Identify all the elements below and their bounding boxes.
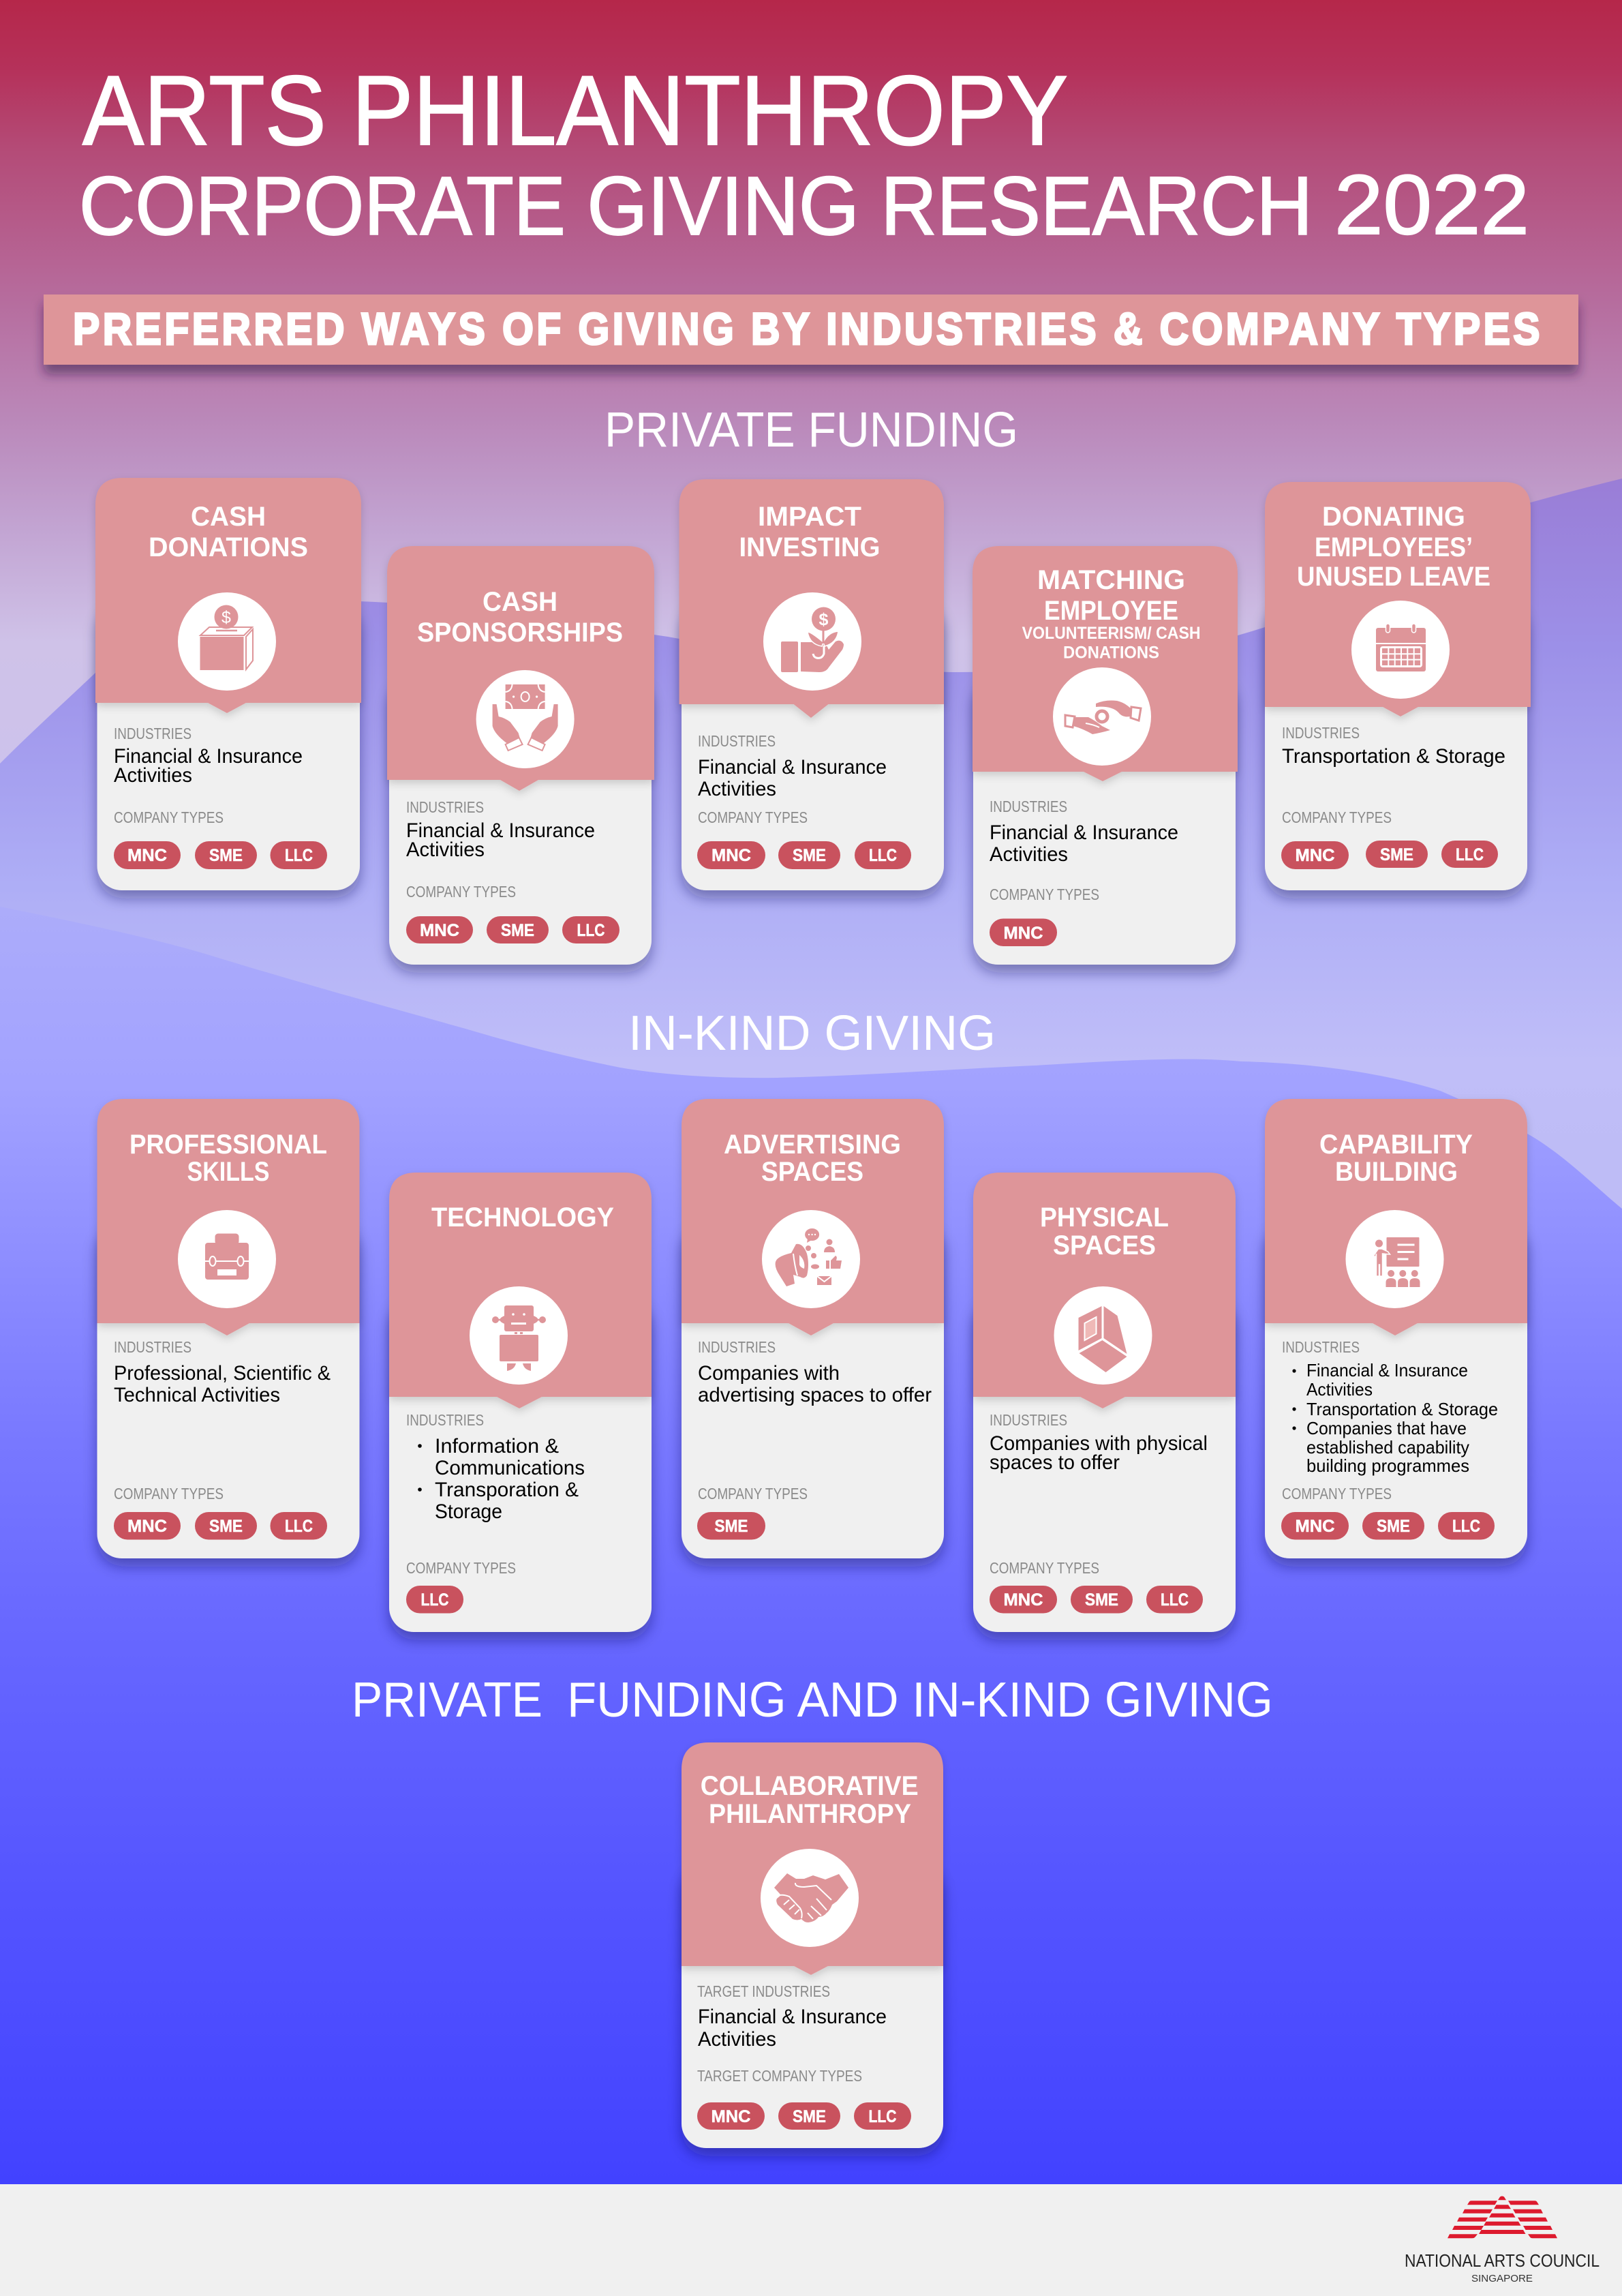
card title bbox=[1319, 1130, 1473, 1187]
industries: Storage bbox=[435, 1500, 502, 1523]
industries bbox=[990, 1411, 1208, 1474]
card title bbox=[417, 587, 623, 648]
card header bbox=[95, 478, 361, 713]
industries bbox=[406, 798, 595, 861]
company types: LLC bbox=[1456, 845, 1484, 864]
industries: INDUSTRIES bbox=[698, 732, 776, 750]
icon: calendar bbox=[1351, 601, 1450, 699]
industries: building programmes bbox=[1306, 1455, 1469, 1476]
panel: advertising spaces bbox=[682, 1099, 944, 1558]
company types: MNC bbox=[1003, 1590, 1043, 1610]
company types: MNC bbox=[127, 1517, 167, 1536]
industries bbox=[1282, 1338, 1498, 1476]
industries: Companies with bbox=[698, 1362, 840, 1385]
industries: INDUSTRIES bbox=[114, 725, 192, 742]
card title: PHILANTHROPY bbox=[709, 1799, 911, 1829]
icon: hands holding banknote bbox=[476, 670, 575, 768]
card header bbox=[682, 1742, 943, 1975]
card title: TECHNOLOGY bbox=[431, 1203, 614, 1233]
card header bbox=[682, 1099, 944, 1335]
industries: INDUSTRIES bbox=[1282, 1338, 1360, 1356]
card title: CAPABILITY bbox=[1319, 1130, 1473, 1160]
company types bbox=[1281, 1485, 1495, 1539]
company types: COMPANY TYPES bbox=[698, 809, 808, 826]
icon: briefcase bbox=[178, 1210, 276, 1308]
industries: INDUSTRIES bbox=[114, 1338, 192, 1356]
industries: Financial & Insurance bbox=[406, 819, 595, 842]
card title: EMPLOYEE bbox=[1044, 596, 1178, 626]
icon: hands exchanging coin bbox=[1053, 667, 1151, 766]
card title bbox=[129, 1130, 327, 1187]
industries: Activities bbox=[1306, 1379, 1373, 1400]
logo: National Arts Council: NATIONAL ARTS COUNCIL bbox=[1405, 2250, 1600, 2271]
card header bbox=[679, 479, 944, 718]
heading: in-kind giving: IN-KIND GIVING bbox=[628, 1006, 996, 1061]
panel: technology bbox=[389, 1173, 652, 1632]
company types: MNC bbox=[1295, 1517, 1334, 1536]
panel: capability building bbox=[1265, 1099, 1527, 1558]
title: CORPORATE GIVING RESEARCH bbox=[79, 160, 1313, 252]
target industries: TARGET INDUSTRIES bbox=[697, 1982, 830, 2000]
title bbox=[79, 55, 1529, 252]
card title: ADVERTISING bbox=[724, 1130, 901, 1160]
card title: CASH bbox=[483, 587, 557, 617]
company types bbox=[990, 1559, 1203, 1613]
company types: MNC bbox=[420, 921, 459, 940]
panel: matching employee bbox=[973, 546, 1238, 965]
industries bbox=[1282, 724, 1505, 768]
card header bbox=[1265, 482, 1531, 716]
company types bbox=[1281, 809, 1498, 869]
icon: presenter and audience bbox=[1345, 1210, 1443, 1308]
card title: SPACES bbox=[1053, 1230, 1156, 1260]
card title: DONATING bbox=[1322, 502, 1465, 532]
card title: UNUSED LEAVE bbox=[1297, 562, 1490, 592]
industries: INDUSTRIES bbox=[698, 1338, 776, 1356]
industries: spaces to offer bbox=[990, 1451, 1120, 1474]
industries: established capability bbox=[1306, 1437, 1469, 1457]
card title bbox=[149, 502, 308, 562]
industries: Transportation & Storage bbox=[1282, 745, 1505, 768]
company types: SME bbox=[209, 1517, 243, 1536]
card title: SPONSORSHIPS bbox=[417, 618, 623, 648]
panel: cash donations bbox=[95, 478, 361, 890]
company types: LLC bbox=[577, 921, 605, 940]
company types: COMPANY TYPES bbox=[990, 886, 1099, 903]
panel: physical spaces bbox=[973, 1173, 1236, 1632]
company types: SME bbox=[209, 846, 243, 865]
company types: SME bbox=[501, 921, 534, 940]
industries: Information & bbox=[435, 1435, 559, 1457]
heading: private funding: PRIVATE FUNDING bbox=[605, 403, 1018, 457]
icon: donation box: $ bbox=[221, 608, 231, 627]
industries: INDUSTRIES bbox=[406, 1411, 484, 1429]
company types bbox=[697, 1485, 808, 1539]
card title bbox=[1297, 502, 1490, 592]
card title: COLLABORATIVE bbox=[701, 1771, 919, 1801]
target company types: MNC bbox=[711, 2107, 751, 2126]
company types: LLC bbox=[1452, 1517, 1480, 1536]
industries: Activities bbox=[698, 778, 776, 800]
industries bbox=[698, 1338, 932, 1406]
card title bbox=[1022, 565, 1201, 663]
card header bbox=[1265, 1099, 1527, 1335]
company types: COMPANY TYPES bbox=[1282, 1485, 1392, 1502]
heading: private funding and in-kind giving: FUNDING AND IN-KIND GIVING bbox=[567, 1673, 1273, 1727]
card title: PROFESSIONAL bbox=[129, 1130, 327, 1160]
company types bbox=[114, 809, 327, 869]
card title: INVESTING bbox=[739, 532, 881, 562]
icon: handshake bbox=[761, 1849, 859, 1947]
icon: robot bbox=[470, 1286, 568, 1385]
industries: Technical Activities bbox=[114, 1384, 280, 1406]
company types: COMPANY TYPES bbox=[1282, 809, 1392, 826]
card title: SKILLS bbox=[187, 1157, 270, 1187]
industries: INDUSTRIES bbox=[990, 1411, 1067, 1429]
logo: National Arts Council: SINGAPORE bbox=[1471, 2273, 1533, 2284]
card title: VOLUNTEERISM/ CASH bbox=[1022, 624, 1201, 643]
company types: COMPANY TYPES bbox=[114, 809, 224, 826]
icon: 3D room bbox=[1054, 1286, 1152, 1385]
company types bbox=[697, 809, 911, 869]
company types: COMPANY TYPES bbox=[406, 883, 516, 901]
target industries bbox=[697, 1982, 887, 2051]
company types: LLC bbox=[421, 1590, 448, 1610]
banner: preferred ways of giving bbox=[44, 294, 1578, 365]
company types: COMPANY TYPES bbox=[114, 1485, 224, 1502]
industries: INDUSTRIES bbox=[1282, 724, 1360, 742]
icon: hand with growing coin: $ bbox=[819, 610, 829, 629]
industries: INDUSTRIES bbox=[990, 798, 1067, 815]
target industries: Financial & Insurance bbox=[698, 2006, 887, 2028]
industries: Financial & Insurance bbox=[1306, 1360, 1468, 1380]
company types: COMPANY TYPES bbox=[406, 1559, 516, 1577]
card title: PHYSICAL bbox=[1040, 1203, 1169, 1233]
card header bbox=[389, 1173, 652, 1408]
target company types bbox=[697, 2067, 911, 2130]
target company types: SME bbox=[793, 2107, 826, 2126]
card header bbox=[973, 546, 1238, 781]
company types bbox=[990, 886, 1099, 946]
panel: professional skills bbox=[97, 1099, 360, 1558]
company types bbox=[406, 1559, 516, 1613]
industries: Transportation & Storage bbox=[1306, 1399, 1498, 1419]
card title bbox=[1040, 1203, 1169, 1260]
company types bbox=[114, 1485, 327, 1539]
industries bbox=[114, 725, 303, 787]
target industries: Activities bbox=[698, 2028, 776, 2051]
card title: EMPLOYEES’ bbox=[1315, 532, 1473, 562]
icon: donation box bbox=[178, 592, 276, 691]
company types: MNC bbox=[1295, 846, 1334, 865]
industries bbox=[990, 798, 1178, 866]
card header bbox=[973, 1173, 1236, 1408]
industries: Communications bbox=[435, 1457, 585, 1479]
card title: SPACES bbox=[761, 1157, 863, 1187]
industries bbox=[114, 1338, 331, 1406]
industries: Companies that have bbox=[1306, 1418, 1467, 1438]
industries: Financial & Insurance bbox=[990, 821, 1178, 844]
industries: Financial & Insurance bbox=[114, 745, 303, 768]
icon: hand with growing coin bbox=[763, 592, 861, 691]
panel: impact investing bbox=[679, 479, 944, 890]
card header bbox=[387, 546, 654, 791]
industries: Activities bbox=[990, 843, 1068, 866]
card title: IMPACT bbox=[758, 502, 861, 532]
card title: MATCHING bbox=[1037, 565, 1185, 595]
target company types: TARGET COMPANY TYPES bbox=[697, 2067, 862, 2085]
card title: BUILDING bbox=[1335, 1157, 1458, 1187]
company types: LLC bbox=[285, 1517, 313, 1536]
industries: Financial & Insurance bbox=[698, 756, 887, 779]
industries bbox=[698, 732, 887, 800]
company types: SME bbox=[714, 1517, 748, 1536]
panel: cash sponsorships bbox=[387, 546, 654, 965]
company types: COMPANY TYPES bbox=[698, 1485, 808, 1502]
company types: COMPANY TYPES bbox=[990, 1559, 1099, 1577]
industries: Professional, Scientific & bbox=[114, 1362, 331, 1385]
industries: Activities bbox=[114, 764, 192, 787]
company types: SME bbox=[793, 846, 826, 865]
card header bbox=[97, 1099, 360, 1335]
title: 2022 bbox=[1334, 158, 1529, 252]
target company types: LLC bbox=[868, 2107, 897, 2126]
panel: donating employees' unused leave bbox=[1265, 482, 1531, 890]
card title: DONATIONS bbox=[1063, 644, 1159, 663]
industries: Companies with physical bbox=[990, 1432, 1208, 1455]
background wave: upper purple bbox=[0, 479, 1622, 1295]
background wave: lower blue bbox=[0, 907, 1622, 2296]
industries: advertising spaces to offer bbox=[698, 1384, 932, 1406]
heading: private funding and in-kind giving: PRIVATE bbox=[352, 1673, 542, 1727]
company types: SME bbox=[1380, 845, 1413, 864]
icon: megaphone and social bbox=[762, 1210, 860, 1308]
industries: Activities bbox=[406, 839, 485, 861]
card title bbox=[724, 1130, 901, 1187]
company types: SME bbox=[1085, 1590, 1118, 1610]
company types: MNC bbox=[1003, 924, 1043, 943]
card title: CASH bbox=[191, 502, 266, 532]
card title bbox=[701, 1771, 919, 1829]
company types: MNC bbox=[711, 846, 751, 865]
company types: LLC bbox=[1161, 1590, 1189, 1610]
logo: National Arts Council bbox=[1405, 2196, 1600, 2284]
company types: LLC bbox=[285, 846, 313, 865]
industries: INDUSTRIES bbox=[406, 798, 484, 816]
card title: DONATIONS bbox=[149, 532, 308, 562]
industries bbox=[406, 1411, 585, 1523]
footer band bbox=[0, 2184, 1622, 2296]
company types bbox=[406, 883, 619, 943]
title: ARTS PHILANTHROPY bbox=[82, 55, 1068, 166]
panel: collaborative philanthropy bbox=[682, 1742, 943, 2148]
company types: LLC bbox=[869, 846, 897, 865]
card title bbox=[739, 502, 881, 562]
industries: Transporation & bbox=[435, 1479, 579, 1501]
company types: MNC bbox=[127, 846, 167, 865]
company types: SME bbox=[1377, 1517, 1410, 1536]
